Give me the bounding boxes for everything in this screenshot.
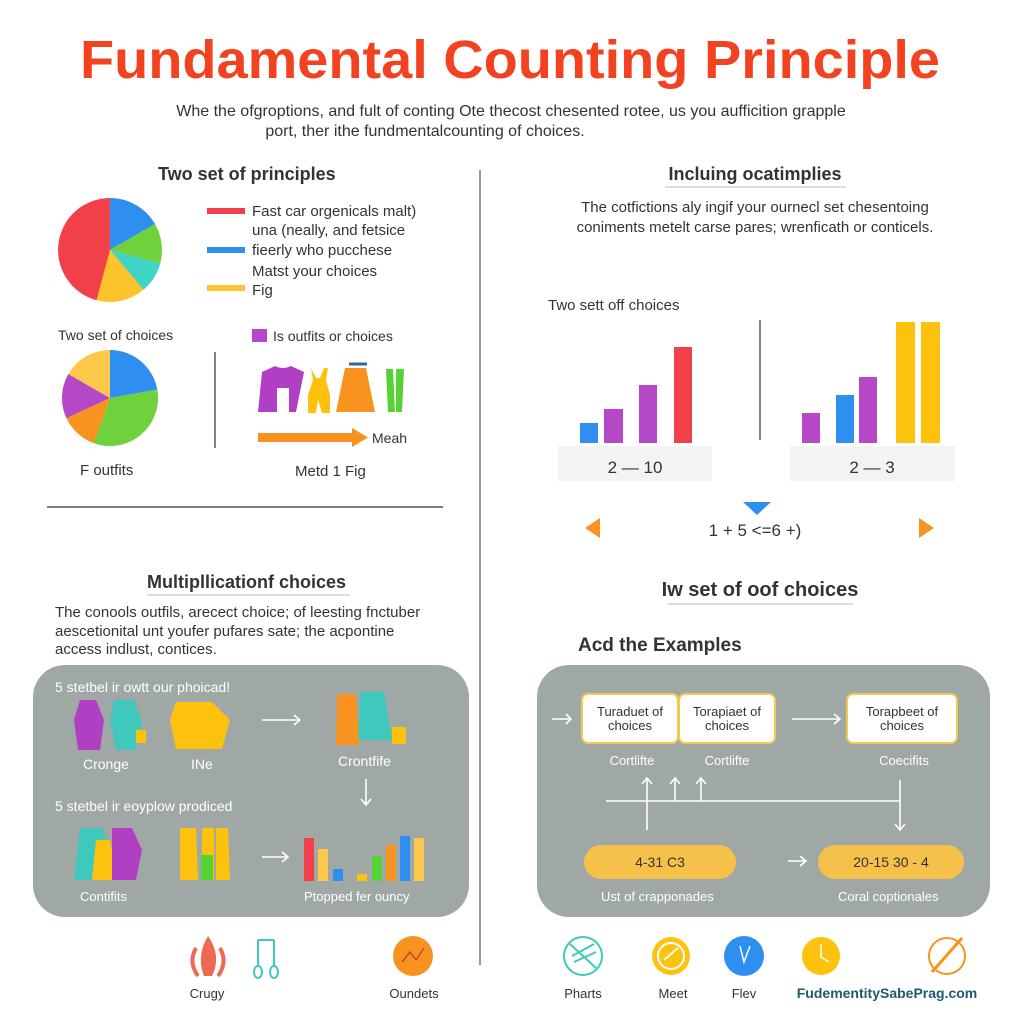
panel: right example flow	[537, 665, 990, 917]
box 2	[679, 694, 775, 743]
legend 1: Fast car orgenicals malt)	[252, 203, 416, 220]
panel: left outfit flow: Cronge	[83, 756, 129, 772]
box 1: choices	[608, 718, 653, 733]
pill 2	[818, 845, 964, 879]
small bar chart	[304, 836, 424, 881]
equation with markers	[585, 502, 934, 540]
clothing icons	[258, 364, 404, 413]
description right: coniments metelt carse pares; wrenficath or conticels.	[577, 219, 933, 236]
panel: left outfit flow: Contifits	[80, 889, 127, 904]
description left: The conools outfils, arecect choice; of leesting fnctuber	[55, 604, 420, 621]
equation with markers: 1 + 5 <=6 +)	[709, 521, 801, 540]
outfit icons row 2	[74, 828, 230, 880]
icon: flev	[724, 936, 764, 1001]
labels	[80, 462, 366, 480]
panel: left outfit flow: Crontfife	[338, 753, 391, 769]
box 3: Torapbeet of	[866, 704, 939, 719]
heading: examples: Acd the Examples	[578, 635, 742, 656]
outfit icons row 1	[74, 692, 406, 750]
pie chart 1	[58, 198, 162, 302]
pill 1	[584, 845, 736, 879]
legend: outfits: Is outfits or choices	[273, 328, 393, 344]
subtitle	[176, 103, 846, 140]
icon: rings	[254, 940, 278, 978]
heading: choices right: Iw set of oof choices	[662, 579, 858, 601]
legend 1: fieerly who pucchese	[252, 242, 392, 259]
legend 1: Matst your choices	[252, 263, 377, 280]
panel: left outfit flow: 5 stetbel ir owtt our phoicad!	[55, 679, 230, 695]
label: two set of choices: Two set of choices	[58, 327, 173, 343]
subtitle: port, ther ithe fundmentalcounting of choices.	[265, 123, 585, 140]
heading: multiplication of choices: Multipllicationf choices	[147, 572, 346, 592]
box 3	[847, 694, 957, 743]
description left: aescetionital unt youfer pufares sate; the acpontine	[55, 623, 394, 640]
panel: left outfit flow	[33, 665, 469, 917]
arrow: meah: Meah	[372, 430, 407, 446]
icon: compass	[929, 938, 965, 974]
panel: right example flow: Coecifits	[879, 753, 929, 768]
legend 1: una (neally, and fetsice	[252, 222, 405, 239]
description left	[55, 604, 420, 658]
icon: oundets: Oundets	[389, 986, 439, 1001]
description right: The cotfictions aly ingif your ournecl set chesentoing	[581, 199, 929, 216]
box 1	[582, 694, 678, 743]
panel: left outfit flow: Ptopped fer ouncy	[304, 889, 410, 904]
labels: Metd 1 Fig	[295, 463, 366, 480]
icon: meet: Meet	[659, 986, 688, 1001]
labels: F outfits	[80, 462, 133, 479]
description left: access indlust, contices.	[55, 641, 217, 658]
box 1: Turaduet of	[597, 704, 663, 719]
label: two sett off choices: Two sett off choices	[548, 297, 679, 314]
icon: crugy	[190, 936, 225, 1001]
heading: including examples: Incluing ocatimplies	[668, 164, 842, 184]
pill 2: 20-15 30 - 4	[853, 854, 929, 870]
legend 1	[207, 203, 416, 299]
icon: meet	[652, 937, 690, 1001]
panel: left outfit flow: INe	[191, 756, 213, 772]
panel: right example flow: Cortlifte	[610, 753, 654, 768]
bar chart 1: 2 — 10	[608, 458, 662, 477]
bar chart 2	[790, 322, 955, 481]
panel: right example flow: Ust of crapponades	[601, 889, 714, 904]
bar chart 2: 2 — 3	[849, 458, 895, 477]
box 3: choices	[880, 718, 925, 733]
bar chart 1	[558, 347, 712, 481]
pill 1: 4-31 C3	[635, 854, 685, 870]
icon: clock	[802, 937, 840, 975]
icon: oundets	[389, 936, 439, 1001]
box 2: choices	[705, 718, 750, 733]
icon: pharts	[564, 937, 602, 1001]
icon: pharts: Pharts	[564, 986, 602, 1001]
heading: two set of principles: Two set of principles	[158, 164, 336, 184]
box 2: Torapiaet of	[693, 704, 761, 719]
arrow: meah	[258, 428, 407, 447]
panel: right example flow: Cortlifte	[705, 753, 749, 768]
icon: flev: Flev	[732, 986, 757, 1001]
title: Fundamental Counting Principle	[80, 30, 940, 90]
subtitle: Whe the ofgroptions, and fult of conting Ote thecost chesented rotee, us you aufficition grapple	[176, 103, 846, 120]
panel: left outfit flow: 5 stetbel ir eoyplow prodiced	[55, 798, 232, 814]
icon: crugy: Crugy	[190, 986, 225, 1001]
footer url: FudementitySabePrag.com	[797, 985, 977, 1001]
pie chart 2	[62, 350, 158, 446]
legend 1: Fig	[252, 282, 273, 299]
panel: right example flow: Coral coptionales	[838, 889, 939, 904]
description right	[577, 199, 933, 236]
